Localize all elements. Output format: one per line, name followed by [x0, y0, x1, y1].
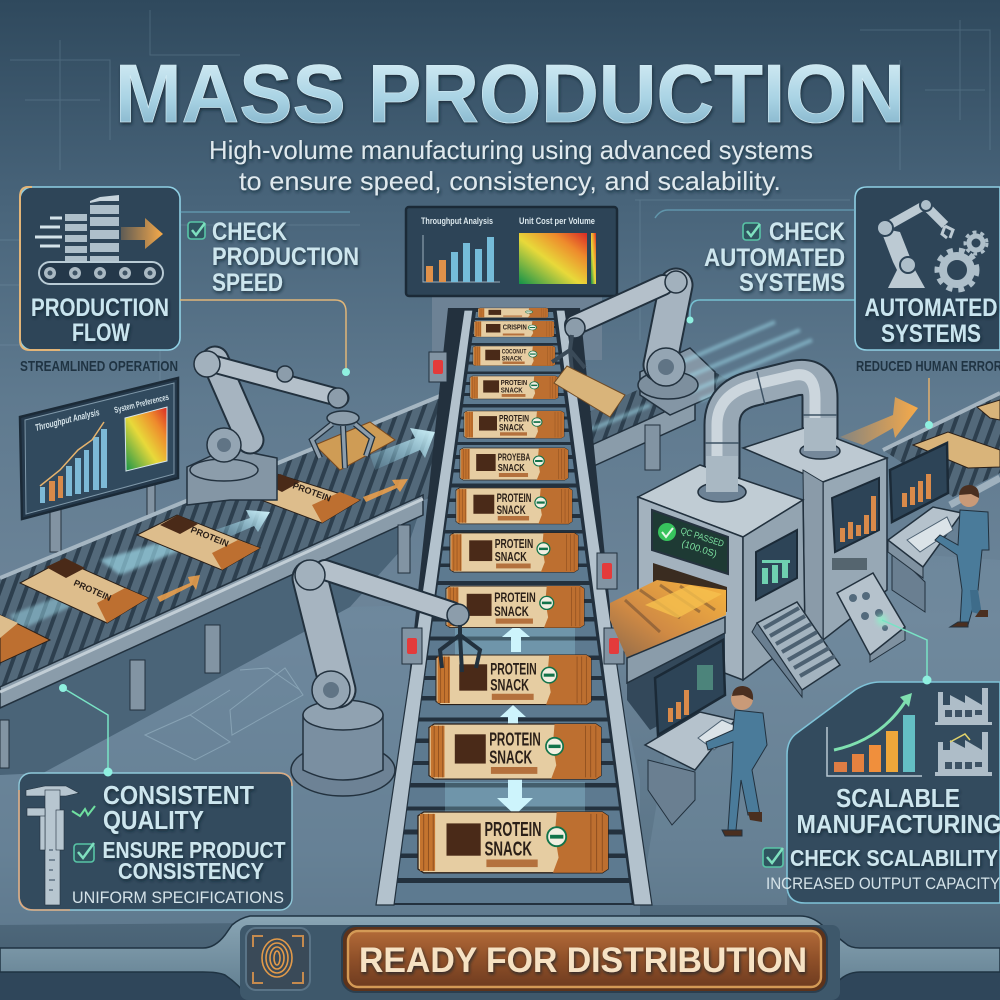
snack bars on central conveyor: SNACK	[489, 748, 532, 768]
orange arrow: upper right	[840, 397, 918, 445]
snack bars on central conveyor: CRISPIN	[503, 324, 527, 331]
robot arm: left	[187, 351, 372, 505]
snack bars on central conveyor: PROTEIN	[495, 537, 533, 551]
lower monitor, desk and operator	[645, 640, 767, 836]
panel: automated systems	[855, 187, 1000, 350]
callout: check automated systems: CHECK	[769, 218, 845, 246]
QC passed display: (100.0S)	[680, 538, 718, 560]
icon: caliper	[26, 786, 79, 905]
callout: check production speed: CHECK	[212, 218, 287, 246]
snack bars on central conveyor: PROTEIN	[499, 414, 529, 424]
blueprint background lines	[0, 10, 990, 380]
ensure product consistency: ENSURE PRODUCT	[102, 837, 286, 863]
far conveyor behind upper robot	[575, 348, 735, 470]
pipe	[705, 372, 837, 490]
panel title: FLOW	[72, 319, 130, 347]
check mark	[72, 806, 95, 816]
chart labels: Unit Cost per Volume	[519, 216, 595, 226]
uniform specifications: UNIFORM SPECIFICATIONS	[72, 888, 284, 907]
left monitor: System Preferences	[113, 392, 170, 415]
snack bars on central conveyor: SNACK	[490, 677, 529, 695]
glow dots	[59, 316, 933, 776]
ensure product consistency	[74, 837, 286, 884]
blue motion streaks	[590, 322, 812, 430]
panel title: SCALABLE	[836, 783, 960, 813]
panel: scalable manufacturing	[763, 682, 1000, 903]
connector: console to scalable panel	[882, 620, 927, 682]
floor shading	[0, 540, 1000, 925]
panel title	[864, 294, 998, 348]
back machine	[743, 418, 887, 640]
operator	[935, 485, 989, 627]
central conveyor	[376, 310, 652, 905]
callout: check production speed: SPEED	[212, 269, 283, 297]
snack bars on central conveyor: SNACK	[484, 839, 532, 861]
panel title: QUALITY	[103, 805, 204, 835]
snack bars on left conveyor	[0, 422, 395, 663]
left conveyor	[0, 395, 440, 775]
subtitle	[209, 135, 813, 196]
screen	[832, 478, 879, 552]
panel title: CONSISTENT	[103, 780, 254, 810]
subtitle: to ensure speed, consistency, and scalability.	[239, 166, 781, 196]
caption: streamlined operation: STREAMLINED OPERATION	[20, 358, 178, 375]
heat map	[519, 233, 587, 284]
snack bars on central conveyor: SNACK	[499, 423, 524, 433]
snack bars on central conveyor: SNACK	[501, 385, 523, 394]
ensure product consistency: CONSISTENCY	[118, 858, 264, 884]
snack bars on central conveyor: PROTEIN	[484, 819, 542, 841]
snack bars on central conveyor: SNACK	[498, 462, 525, 474]
small screen	[756, 530, 797, 600]
icon: production conveyor with stacked output	[35, 195, 163, 284]
snack bars on left conveyor: PROTEIN	[189, 525, 230, 549]
floor blueprint drawing	[145, 668, 303, 760]
panel: production flow	[20, 187, 180, 350]
snack bars on central conveyor: PROTEIN	[497, 491, 531, 505]
callout: check automated systems: AUTOMATED	[704, 244, 845, 272]
central machine frame	[385, 296, 640, 905]
snack bars on central conveyor: SNACK	[502, 354, 523, 362]
growth chart icon	[827, 693, 922, 776]
far right conveyor	[883, 393, 1000, 505]
panel title	[103, 780, 254, 835]
snack bars on central conveyor: PROTEIN	[490, 660, 537, 678]
QC passed display	[652, 510, 728, 574]
snack bars on central conveyor: PROTEIN	[489, 729, 541, 749]
control console	[837, 573, 905, 662]
snack bars on central conveyor: PROTEIN	[494, 590, 536, 605]
snack bars on central conveyor: PROYEBA	[498, 452, 530, 463]
panel title: PRODUCTION	[31, 294, 169, 322]
callout: check automated systems: SYSTEMS	[739, 269, 845, 297]
heat map	[125, 407, 167, 471]
bottom bar	[0, 916, 1000, 1000]
snack bars on left conveyor: PROTEIN	[291, 480, 332, 504]
held snack	[554, 366, 625, 417]
left monitor	[20, 378, 178, 552]
robot arm: upper	[552, 271, 698, 417]
snack bars on central conveyor: SNACK	[494, 603, 529, 619]
chart labels: Throughput Analysis	[421, 216, 493, 226]
panel: consistent quality	[19, 773, 292, 910]
snack bars on central conveyor: SNACK	[495, 549, 527, 564]
snack bars on central conveyor	[418, 308, 608, 873]
title: MASS PRODUCTION	[115, 47, 905, 140]
subtitle: High-volume manufacturing using advanced systems	[209, 135, 813, 165]
snack bars on left conveyor: PROTEIN	[72, 578, 113, 603]
exit ramp	[752, 602, 840, 697]
snack bars on central conveyor: PROTEIN	[501, 378, 527, 387]
callout: check production speed	[188, 218, 359, 297]
conveyor legs	[0, 525, 410, 768]
callout: check production speed: PRODUCTION	[212, 243, 359, 271]
snack bars on central conveyor: COCONUT	[502, 348, 527, 355]
chart labels: Throughput Analysis	[34, 407, 101, 434]
right desk, monitor and operator	[888, 443, 989, 627]
snack bars on central conveyor: SNACK	[497, 503, 526, 517]
callout: check automated systems	[704, 218, 845, 297]
front machine	[638, 456, 805, 680]
panel title: SYSTEMS	[881, 320, 981, 348]
panel title	[31, 294, 169, 347]
robot arm: lower	[291, 560, 480, 796]
chart labels	[421, 216, 595, 226]
connector lines	[63, 210, 929, 772]
red sensor lights	[402, 352, 624, 664]
QC passed display: QC PASSED	[679, 525, 726, 549]
ready for distribution button	[342, 926, 827, 992]
panel title	[796, 783, 1000, 839]
center top monitor	[406, 207, 617, 296]
glowing up and down arrows on belt	[445, 620, 585, 815]
fingerprint badge	[246, 928, 310, 990]
throughput bar chart	[423, 235, 500, 282]
ready for distribution button: READY FOR DISTRIBUTION	[359, 941, 807, 980]
oven conveyor	[610, 563, 727, 730]
icon: robot arm and gears	[877, 199, 987, 290]
throughput bars	[40, 422, 107, 503]
arrows on left conveyor	[10, 428, 435, 630]
factory icons	[935, 688, 992, 776]
operator	[706, 686, 767, 836]
